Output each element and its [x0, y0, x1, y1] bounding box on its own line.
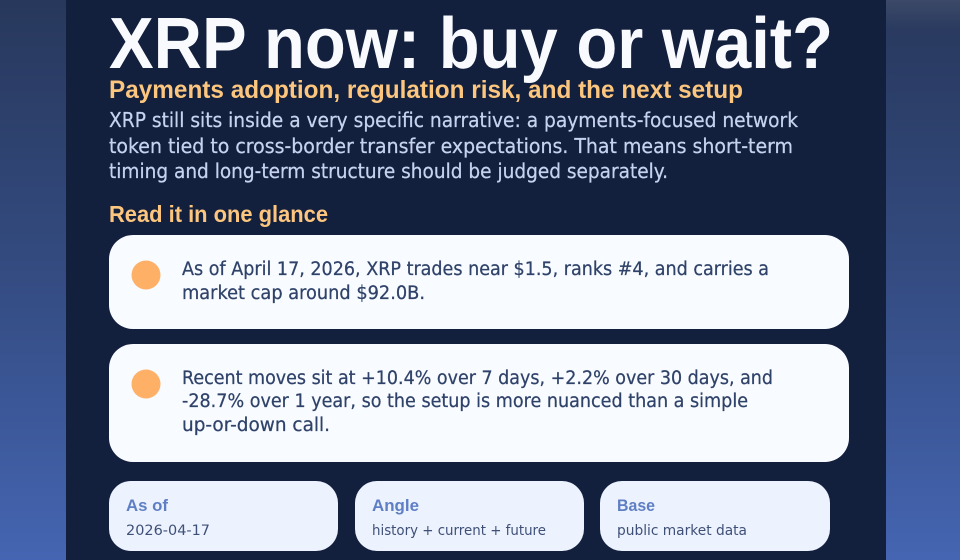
- meta card: as of: [109, 481, 338, 551]
- icon: orange dot: [132, 260, 160, 290]
- card: price snapshot: [109, 235, 849, 329]
- card text: [182, 368, 773, 436]
- card text: -28.7% over 1 year, so the setup is more nuanced than a simple: [182, 391, 748, 412]
- meta card: base: Base: [617, 496, 655, 515]
- intro paragraph: [109, 108, 798, 183]
- intro paragraph: XRP still sits inside a very specific narrative: a payments-focused network: [109, 108, 798, 132]
- intro paragraph: token tied to cross-border transfer expectations. That means short-term: [109, 134, 793, 158]
- meta card: base: public market data: [617, 523, 747, 539]
- icon: orange dot: [132, 370, 160, 398]
- meta card: angle: Angle: [372, 496, 419, 515]
- meta card: as of: As of: [126, 496, 168, 515]
- card text: [182, 259, 769, 304]
- meta card: as of: 2026-04-17: [126, 523, 210, 539]
- meta card: base: [600, 481, 830, 551]
- card text: As of April 17, 2026, XRP trades near $1.5, ranks #4, and carries a: [182, 259, 769, 280]
- intro paragraph: timing and long-term structure should be judged separately.: [109, 159, 668, 183]
- card text: market cap around $92.0B.: [182, 283, 425, 304]
- meta card: angle: [355, 481, 584, 551]
- title: XRP now: buy or wait?: [109, 4, 833, 84]
- meta card: angle: history + current + future: [372, 523, 546, 539]
- card: recent moves: [109, 344, 849, 462]
- card text: up-or-down call.: [182, 415, 330, 436]
- subtitle: Payments adoption, regulation risk, and the next setup: [109, 76, 743, 104]
- section heading: Read it in one glance: [109, 201, 328, 227]
- card text: Recent moves sit at +10.4% over 7 days, +2.2% over 30 days, and: [182, 368, 773, 389]
